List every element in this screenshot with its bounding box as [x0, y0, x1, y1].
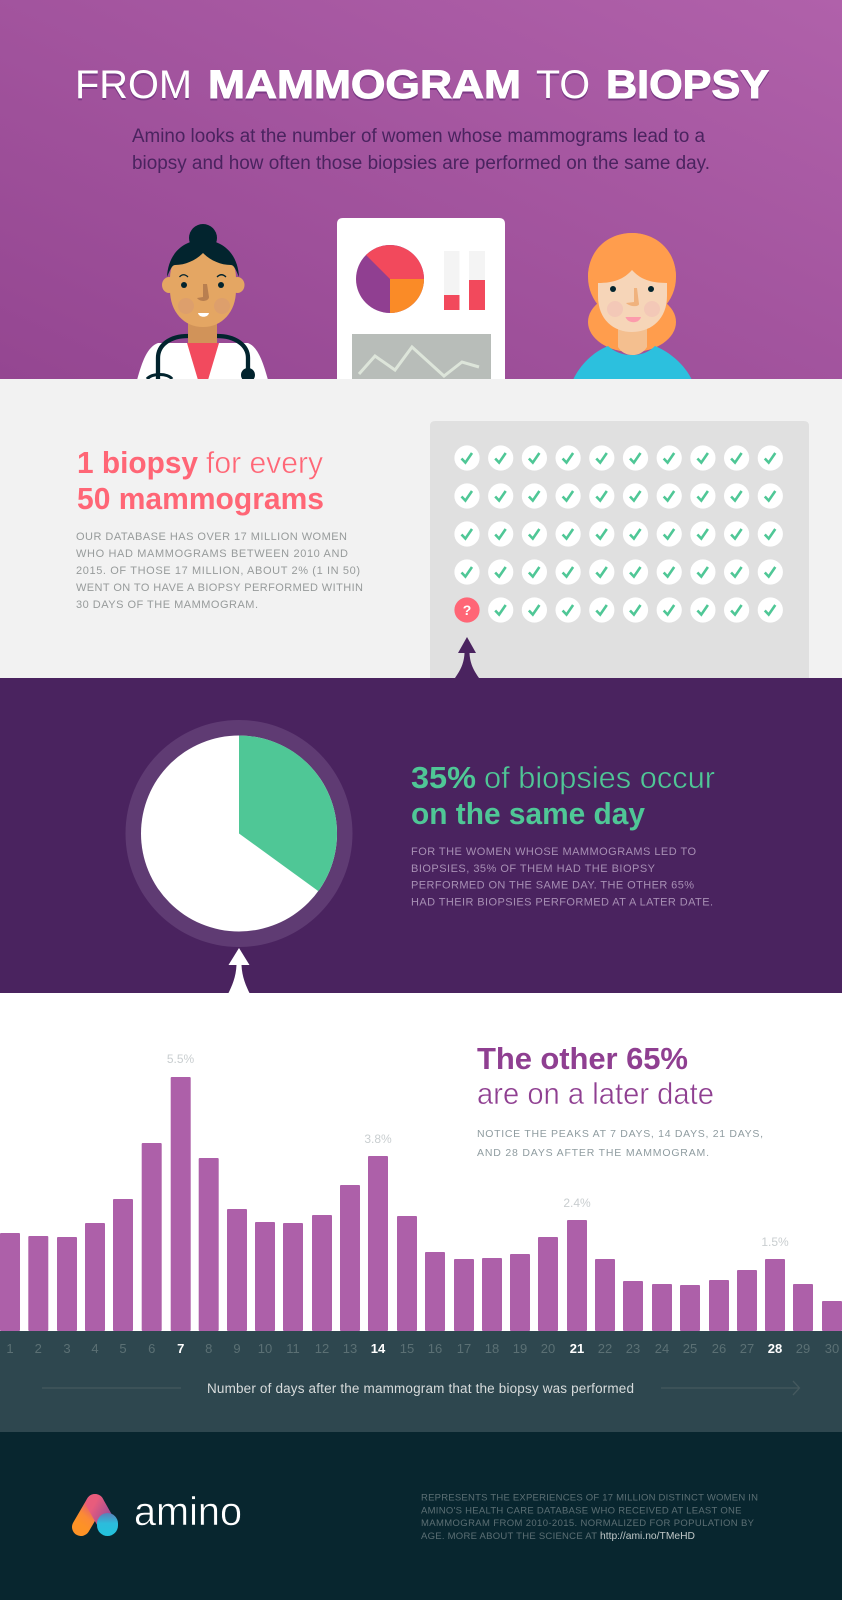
title: FROM	[75, 63, 192, 107]
subtitle: Amino looks at the number of women whose mammograms lead to a	[132, 126, 705, 147]
panel: footer background	[0, 1432, 842, 1600]
axis day numbers: 18	[485, 1341, 499, 1356]
peak percentage labels: 5.5%	[167, 1052, 195, 1066]
axis day numbers: 11	[286, 1341, 300, 1356]
axis day numbers: 13	[343, 1341, 357, 1356]
axis day numbers: 19	[513, 1341, 527, 1356]
pie chart on card	[356, 245, 424, 313]
axis caption: Number of days after the mammogram that the biopsy was performed	[207, 1381, 634, 1396]
panel: header background	[0, 0, 842, 380]
axis day numbers: 8	[205, 1341, 212, 1356]
text block: peaks description: AND 28 DAYS AFTER THE MAMMOGRAM.	[477, 1147, 709, 1159]
title: BIOPSY	[606, 63, 769, 107]
axis day numbers: 1	[6, 1341, 14, 1356]
text block: footer source note: AMINO'S HEALTH CARE DATABASE WHO RECEIVED AT LEAST ONE	[421, 1506, 742, 1516]
arrow: up to question mark	[455, 637, 479, 678]
heading: 35 percent on the same day	[411, 761, 715, 831]
text block: footer source note: http://ami.no/TMeHD	[600, 1530, 695, 1542]
panel: later date background	[0, 993, 842, 1332]
text block: database description: WENT ON TO HAVE A BIOPSY PERFORMED WITHIN	[76, 582, 363, 594]
subtitle	[132, 126, 710, 174]
panel: checkmark grid	[430, 421, 809, 679]
text block: database description: OUR DATABASE HAS OVER 17 MILLION WOMEN	[76, 531, 347, 543]
icon: question mark circle	[454, 597, 480, 623]
text block: database description: 30 DAYS OF THE MAMMOGRAM.	[76, 599, 258, 611]
peak percentage labels: 2.4%	[563, 1196, 591, 1210]
illustration: doctor	[137, 224, 268, 382]
panel: 1 in 50 background	[0, 379, 842, 679]
heading: 35 percent on the same day: 35%	[411, 761, 476, 795]
peak percentage labels: 3.8%	[364, 1132, 392, 1146]
axis day numbers: 27	[740, 1341, 754, 1356]
axis day numbers: 30	[825, 1341, 839, 1356]
logo: amino	[81, 1490, 242, 1536]
illustration: report card	[337, 218, 505, 380]
axis day numbers: 14	[371, 1341, 386, 1356]
bar chart on card	[444, 251, 485, 310]
axis day numbers: 20	[541, 1341, 555, 1356]
text block: peaks description	[477, 1128, 763, 1159]
axis day numbers: 12	[315, 1341, 329, 1356]
icon: question mark circle: ?	[463, 602, 471, 618]
text block: same day description: BIOPSIES, 35% OF THEM HAD THE BIOPSY	[411, 863, 656, 875]
peak percentage labels	[167, 1052, 789, 1249]
heading: 1 biopsy for every 50 mammograms	[77, 446, 324, 516]
heading: the other 65 percent: The other 65%	[477, 1041, 688, 1076]
axis day numbers: 29	[796, 1341, 810, 1356]
heading: 35 percent on the same day: of biopsies occur	[484, 761, 715, 795]
panel: same day background	[0, 678, 842, 994]
title: MAMMOGRAM	[208, 63, 521, 107]
heading: 35 percent on the same day: on the same day	[411, 797, 645, 831]
peak percentage labels: 1.5%	[761, 1235, 789, 1249]
title: TO	[536, 63, 590, 107]
text block: same day description: HAD THEIR BIOPSIES PERFORMED AT A LATER DATE.	[411, 896, 713, 908]
axis day numbers: 25	[683, 1341, 697, 1356]
heading: 1 biopsy for every 50 mammograms: 50 mammograms	[77, 482, 324, 516]
axis day numbers: 23	[626, 1341, 640, 1356]
text block: peaks description: NOTICE THE PEAKS AT 7 DAYS, 14 DAYS, 21 DAYS,	[477, 1128, 763, 1140]
axis day numbers: 17	[457, 1341, 471, 1356]
axis day numbers: 3	[63, 1341, 71, 1356]
axis day numbers: 15	[400, 1341, 414, 1356]
heading: the other 65 percent	[477, 1041, 714, 1111]
text block: database description	[76, 531, 363, 611]
arrow: axis direction	[42, 1381, 800, 1395]
axis day numbers: 7	[177, 1341, 184, 1356]
axis day numbers: 22	[598, 1341, 612, 1356]
illustration: patient	[573, 233, 692, 380]
text block: database description: WHO HAD MAMMOGRAMS BETWEEN 2010 AND	[76, 548, 348, 560]
axis day numbers: 2	[35, 1341, 42, 1356]
text block: footer source note: REPRESENTS THE EXPERIENCES OF 17 MILLION DISTINCT WOMEN IN	[421, 1492, 758, 1504]
axis day numbers: 9	[233, 1341, 241, 1356]
text block: same day description: PERFORMED ON THE SAME DAY. THE OTHER 65%	[411, 880, 694, 892]
text block: same day description	[411, 846, 713, 908]
text block: footer source note: AGE. MORE ABOUT THE SCIENCE AT	[421, 1531, 597, 1542]
axis day numbers: 5	[119, 1341, 127, 1356]
axis day numbers: 26	[712, 1341, 726, 1356]
text block: footer source note: MAMMOGRAM FROM 2010-2015. NORMALIZED FOR POPULATION BY	[421, 1518, 755, 1529]
arrow: up to pie chart	[228, 948, 250, 994]
text block: database description: 2015. OF THOSE 17 MILLION, ABOUT 2% (1 IN 50)	[76, 565, 360, 577]
axis day numbers: 4	[91, 1341, 99, 1356]
panel: axis band	[0, 1331, 842, 1433]
heading: the other 65 percent: are on a later date	[477, 1076, 714, 1111]
text block: footer source note	[421, 1492, 758, 1542]
bar chart: days after mammogram	[0, 1077, 842, 1331]
title	[75, 63, 769, 107]
axis day numbers: 16	[428, 1341, 442, 1356]
axis day numbers: 24	[655, 1341, 669, 1356]
line chart on card	[352, 334, 491, 380]
subtitle: biopsy and how often those biopsies are performed on the same day.	[132, 153, 710, 174]
logo: amino: amino	[134, 1490, 242, 1534]
text block: same day description: FOR THE WOMEN WHOSE MAMMOGRAMS LED TO	[411, 846, 696, 858]
pie chart: 35 percent same day	[126, 720, 352, 947]
axis day numbers: 21	[570, 1341, 584, 1356]
axis day numbers: 10	[258, 1341, 272, 1356]
axis day numbers: 6	[148, 1341, 155, 1356]
axis day numbers	[6, 1341, 839, 1356]
heading: 1 biopsy for every 50 mammograms: for every	[206, 446, 324, 480]
icon: amino mark	[81, 1503, 118, 1536]
axis day numbers: 28	[768, 1341, 782, 1356]
heading: 1 biopsy for every 50 mammograms: 1 biopsy	[77, 446, 198, 480]
